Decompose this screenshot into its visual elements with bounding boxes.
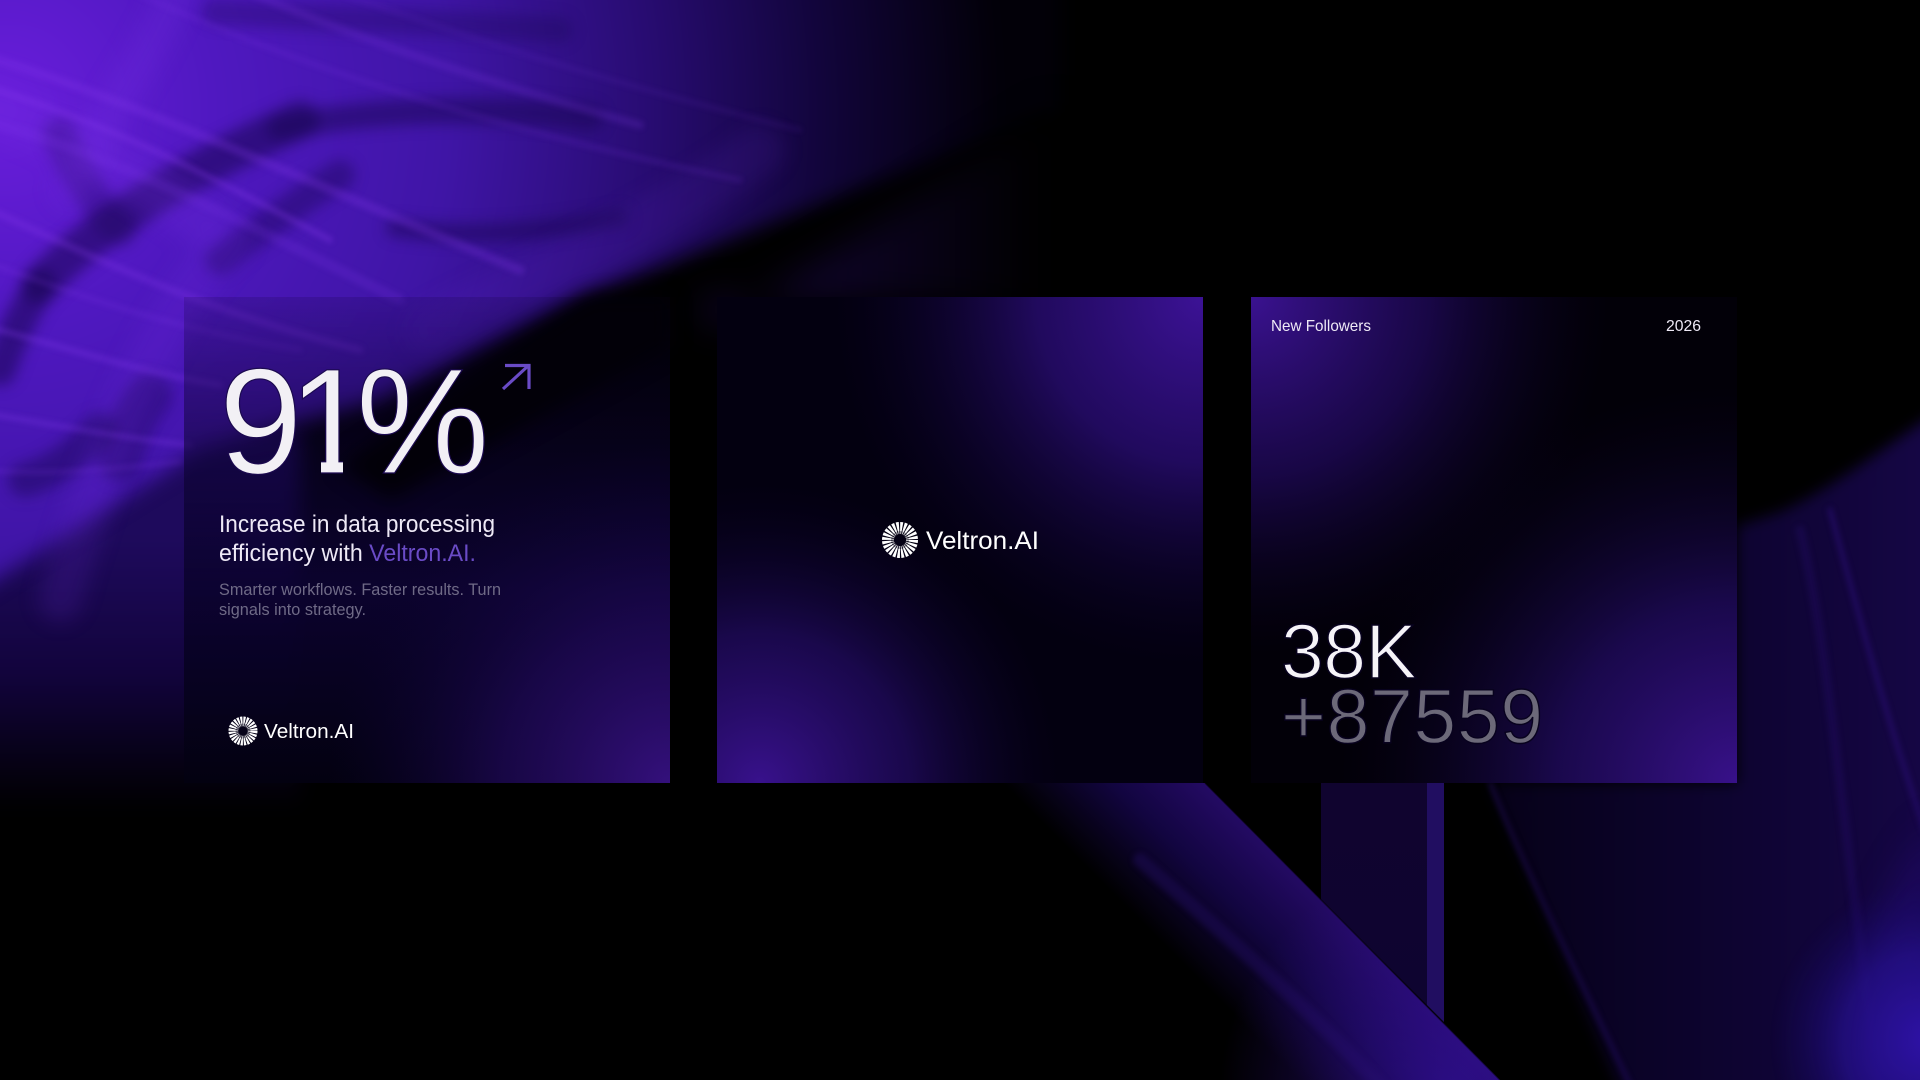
description: Increase in data processing bbox=[219, 511, 495, 538]
dark diagonal band bbox=[340, 297, 669, 500]
supporting text line one: Smarter workflows. Faster results. Turn bbox=[219, 581, 501, 599]
big stat: % bbox=[356, 337, 489, 505]
supporting text line two: signals into strategy. bbox=[219, 601, 366, 619]
stat: +87559: +87559 bbox=[1281, 674, 1544, 760]
big stat: 1 bbox=[288, 337, 371, 505]
label: year: 2026 bbox=[1666, 318, 1701, 335]
label: New Followers: New Followers bbox=[1271, 318, 1371, 335]
stat: 38K: 38K bbox=[1281, 609, 1416, 695]
logo: Veltron.AI: Veltron.AI bbox=[264, 720, 354, 743]
description second line: efficiency with Veltron.AI. bbox=[219, 540, 476, 567]
logo: Veltron.AI large bbox=[886, 526, 1039, 555]
background: purple streak mass top left bbox=[0, 0, 1060, 850]
background: purple drapes bottom right bbox=[900, 410, 1920, 1080]
logo: Veltron.AI large: Veltron.AI bbox=[926, 527, 1039, 555]
icon: up-right arrow bbox=[503, 366, 529, 389]
big stat: 9 bbox=[219, 337, 302, 505]
panel: metric card bbox=[184, 297, 670, 783]
panel: logo card bbox=[717, 297, 1203, 783]
panel: followers card bbox=[1251, 297, 1737, 783]
